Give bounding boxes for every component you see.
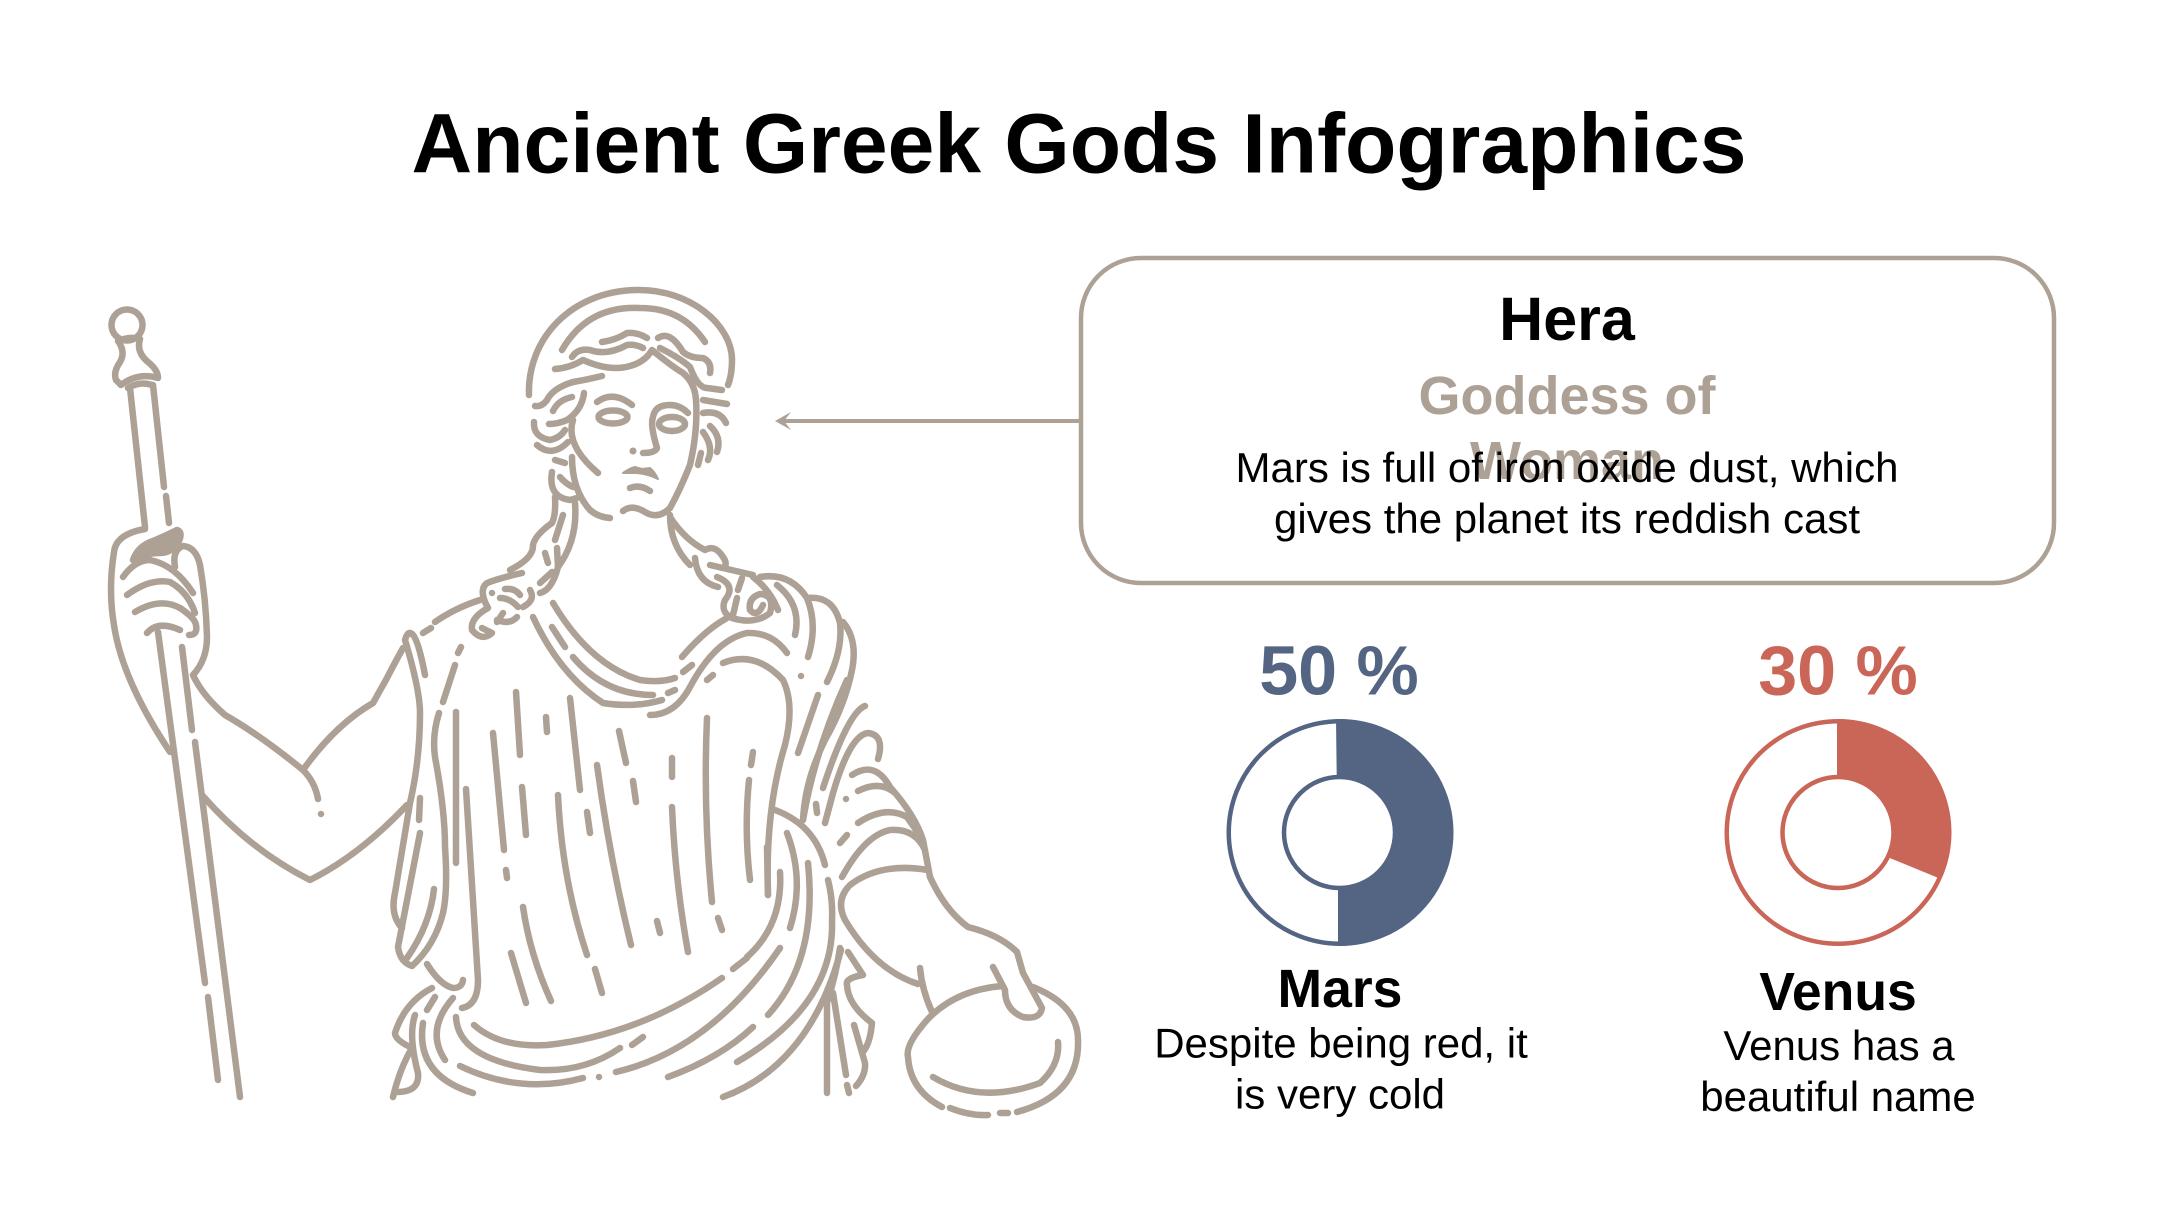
text block: Hera description: Mars is full of iron oxide dust, which (1236, 444, 1898, 491)
icon: raised hand and arm (111, 529, 407, 880)
subheading: Goddess of Woman: Woman (1470, 431, 1664, 491)
panel: Hera callout (1081, 258, 2054, 583)
icon: robe collar (423, 600, 790, 895)
percentage: 30 %: 30 % (1758, 632, 1918, 710)
arrow: callout pointing at Hera (775, 412, 1081, 430)
text block: Venus description: beautiful name (1700, 1073, 1976, 1120)
text block: Mars description: is very cold (1235, 1070, 1445, 1118)
icon: head and face (529, 290, 732, 518)
donut chart: Mars 50% (1229, 719, 1451, 946)
icon: robe folds (493, 676, 865, 1003)
title: Ancient Greek Gods Infographics (412, 96, 1746, 190)
panel: Venus stat (1700, 632, 1976, 1120)
subheading: Goddess of Woman: Goddess of (1418, 366, 1717, 426)
icon: offering plate (908, 986, 1078, 1115)
percentage: 50 %: 50 % (1259, 632, 1419, 710)
label: Venus: Venus (1759, 963, 1917, 1022)
heading: Hera: Hera (1499, 285, 1636, 353)
icon: right sleeve and arm holding plate (803, 680, 1042, 1018)
panel: Mars stat (1154, 632, 1528, 1118)
text block: Mars description: Despite being red, it (1154, 1020, 1528, 1066)
text block: Hera description: gives the planet its reddish cast (1274, 495, 1860, 542)
illustration: Hera line drawing (111, 290, 1078, 1115)
donut chart: Venus 30% (1727, 719, 1951, 944)
icon: waist sash (456, 810, 841, 1097)
icon: lower cloth folds (827, 948, 872, 1093)
icon: braids and shoulder curls (472, 497, 854, 820)
label: Mars: Mars (1278, 960, 1402, 1019)
text block: Venus description: Venus has a (1723, 1022, 1955, 1069)
icon: left sleeve and drapery (393, 633, 478, 1097)
icon: staff (112, 310, 240, 1097)
